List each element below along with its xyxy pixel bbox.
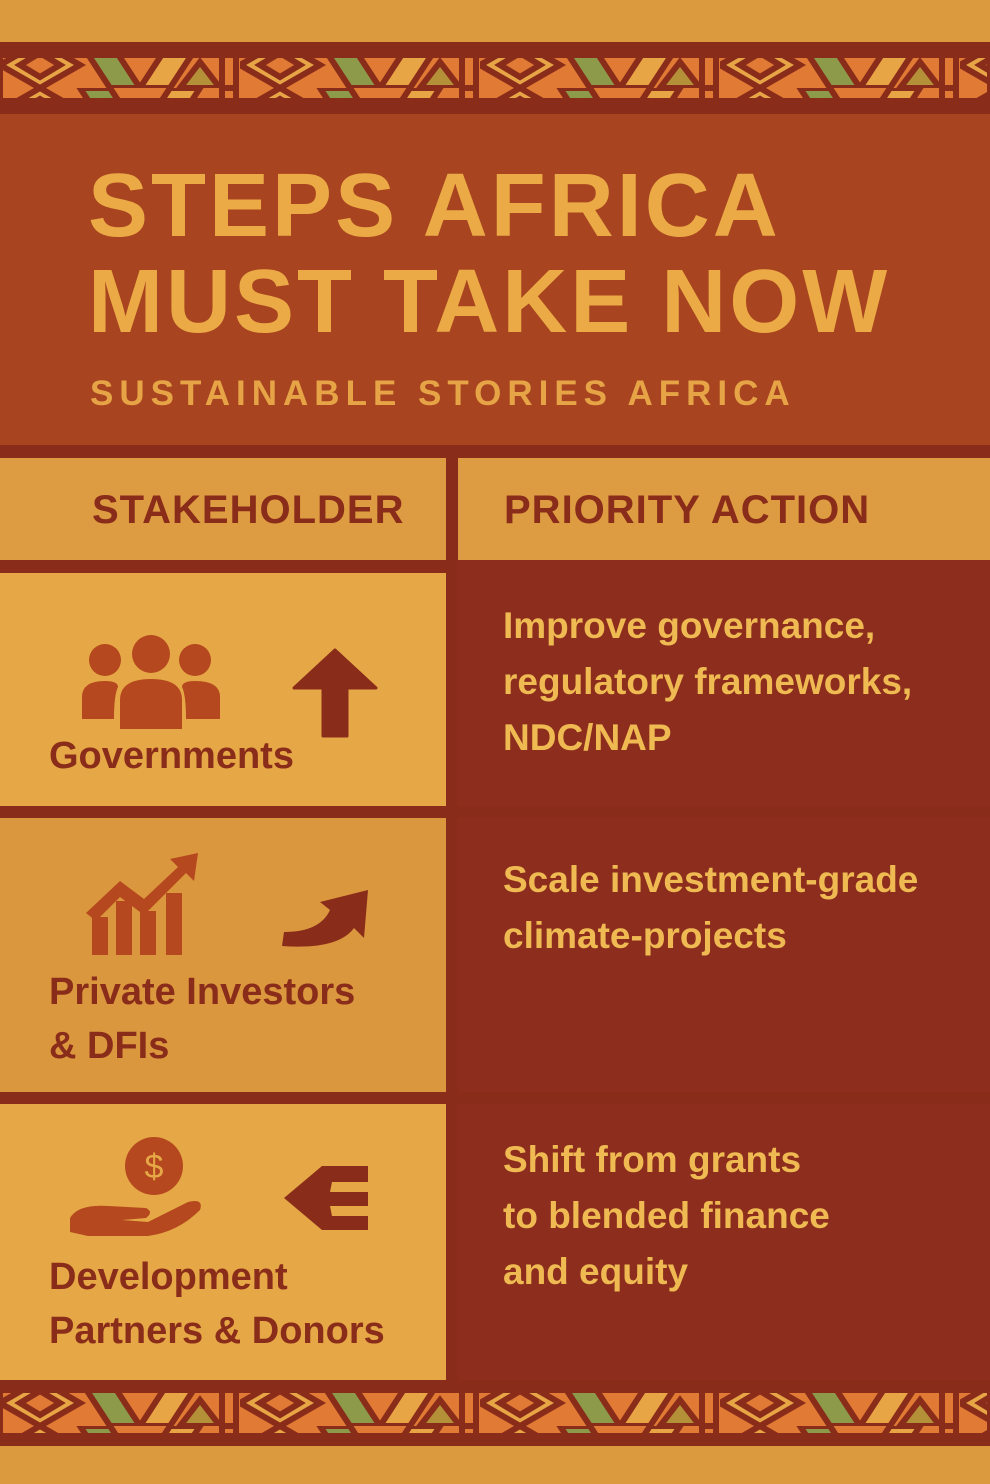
row 1 right: NDC/NAP	[503, 717, 672, 758]
header: stakeholder: STAKEHOLDER	[92, 488, 404, 532]
header: stakeholder	[0, 458, 446, 560]
row 3 left: donors	[0, 1104, 446, 1380]
row 3 right: and equity	[503, 1251, 688, 1292]
title: STEPS AFRICA	[88, 156, 781, 256]
icon: up arrow	[292, 648, 378, 738]
row 1 right: Improve governance,	[503, 605, 875, 646]
label: Private Investors	[49, 971, 355, 1013]
row 1 right	[458, 560, 990, 806]
title: MUST TAKE NOW	[88, 252, 890, 352]
icon: curved arrow	[282, 890, 368, 947]
label: Governments	[49, 735, 294, 777]
header panel	[0, 114, 990, 445]
header: priority action: PRIORITY ACTION	[504, 488, 870, 532]
row 2 right	[458, 818, 990, 1092]
label	[49, 1256, 385, 1352]
subtitle: SUSTAINABLE STORIES AFRICA	[90, 374, 796, 413]
row 1 right: regulatory frameworks,	[503, 661, 912, 702]
icon: hand with coin	[70, 1137, 201, 1236]
label: & DFIs	[49, 1025, 169, 1067]
icon: hand with coin: $	[145, 1148, 164, 1186]
label: Development	[49, 1256, 288, 1298]
label: Partners & Donors	[49, 1310, 385, 1352]
header: priority action	[458, 458, 990, 560]
row 2 right: climate-projects	[503, 915, 787, 956]
icon: people	[82, 635, 220, 729]
row 2 left: investors	[0, 818, 446, 1092]
row 3 right: Shift from grants	[503, 1139, 801, 1180]
bottom border pattern	[0, 1380, 990, 1446]
row 3 right	[458, 1104, 990, 1380]
row 1 left: Governments	[0, 573, 446, 806]
row 3 right: to blended finance	[503, 1195, 830, 1236]
row 2 right: Scale investment-grade	[503, 859, 918, 900]
icon: left arrow	[284, 1166, 368, 1230]
title	[88, 156, 890, 352]
top border pattern	[0, 42, 990, 114]
icon: growth chart	[86, 853, 198, 955]
label	[49, 971, 355, 1067]
